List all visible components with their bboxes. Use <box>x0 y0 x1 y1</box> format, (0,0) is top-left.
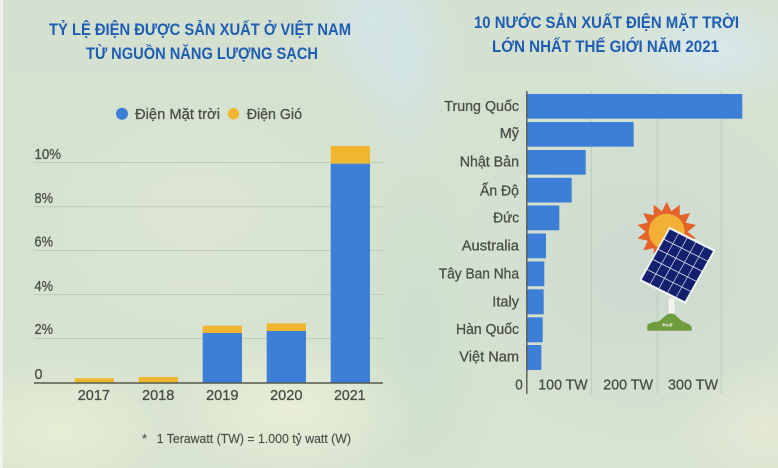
y axis line <box>526 91 528 394</box>
country labels: Trung Quốc <box>444 98 519 115</box>
y axis labels: 6% <box>34 234 53 251</box>
legend: Điện Gió <box>247 106 302 123</box>
x axis labels: 2018 <box>142 387 174 404</box>
bars: 2017 <box>75 378 114 383</box>
bars: 2020 <box>267 323 306 383</box>
country labels: Italy <box>492 294 519 311</box>
bars: 2018 <box>139 377 178 383</box>
value axis labels: 100 TW <box>538 377 588 394</box>
y axis labels <box>34 146 61 383</box>
country labels: Nhật Bản <box>460 154 519 171</box>
x axis <box>34 382 383 384</box>
x axis labels: 2019 <box>206 387 238 404</box>
country labels: Mỹ <box>500 125 519 142</box>
legend: Điện Mặt trời <box>135 106 220 123</box>
icon: base mound <box>647 314 692 331</box>
bars: 2021 <box>331 146 370 383</box>
y axis labels: 8% <box>34 190 53 207</box>
heading: top 10 solar producers: LỚN NHẤT THẾ GIỚI NĂM 2021 <box>492 37 719 56</box>
icon: solar panel <box>639 227 716 304</box>
x axis labels: 2021 <box>334 387 366 404</box>
heading: top 10 solar producers <box>474 13 739 56</box>
y axis labels: 2% <box>34 321 53 338</box>
icon: sun and solar panel <box>638 202 716 331</box>
country labels <box>439 98 520 366</box>
panel: top 10 solar producers <box>439 13 742 394</box>
value axis labels <box>515 377 719 394</box>
logo text: ✳edf <box>662 322 673 328</box>
panel: Vietnam clean energy share <box>34 20 383 446</box>
x axis labels: 2017 <box>78 387 110 404</box>
bars: 2019 <box>203 326 242 383</box>
y axis labels: 0 <box>34 366 42 383</box>
value axis labels: 200 TW <box>603 377 654 394</box>
stacked bar chart <box>34 146 383 404</box>
y axis labels: 10% <box>34 146 61 163</box>
footnote: 1 Terawatt (TW) = 1.000 tỷ watt (W) <box>157 432 351 446</box>
heading: top 10 solar producers: 10 NƯỚC SẢN XUẤT ĐIỆN MẶT TRỜI <box>474 13 739 32</box>
icon: sun <box>638 202 696 262</box>
country labels: Hàn Quốc <box>456 321 519 338</box>
value axis labels: 300 TW <box>668 377 719 394</box>
heading: Vietnam clean energy share: TỶ LỆ ĐIỆN ĐƯỢC SẢN XUẤT Ở VIỆT NAM <box>49 20 351 39</box>
icon: pole <box>667 298 675 322</box>
country labels: Australia <box>462 238 520 255</box>
country labels: Đức <box>493 210 519 227</box>
x axis labels <box>78 387 365 404</box>
horizontal bar chart <box>439 91 742 394</box>
value axis labels: 0 <box>515 377 523 394</box>
bars <box>528 94 742 370</box>
y axis labels: 4% <box>34 278 53 295</box>
heading: Vietnam clean energy share <box>49 20 351 63</box>
country labels: Tây Ban Nha <box>439 266 520 283</box>
country labels: Việt Nam <box>459 349 519 366</box>
footnote: * <box>142 432 147 446</box>
legend <box>116 106 302 123</box>
heading: Vietnam clean energy share: TỪ NGUỒN NĂNG LƯỢNG SẠCH <box>86 44 318 63</box>
country labels: Ấn Độ <box>480 183 519 200</box>
x axis labels: 2020 <box>270 387 302 404</box>
